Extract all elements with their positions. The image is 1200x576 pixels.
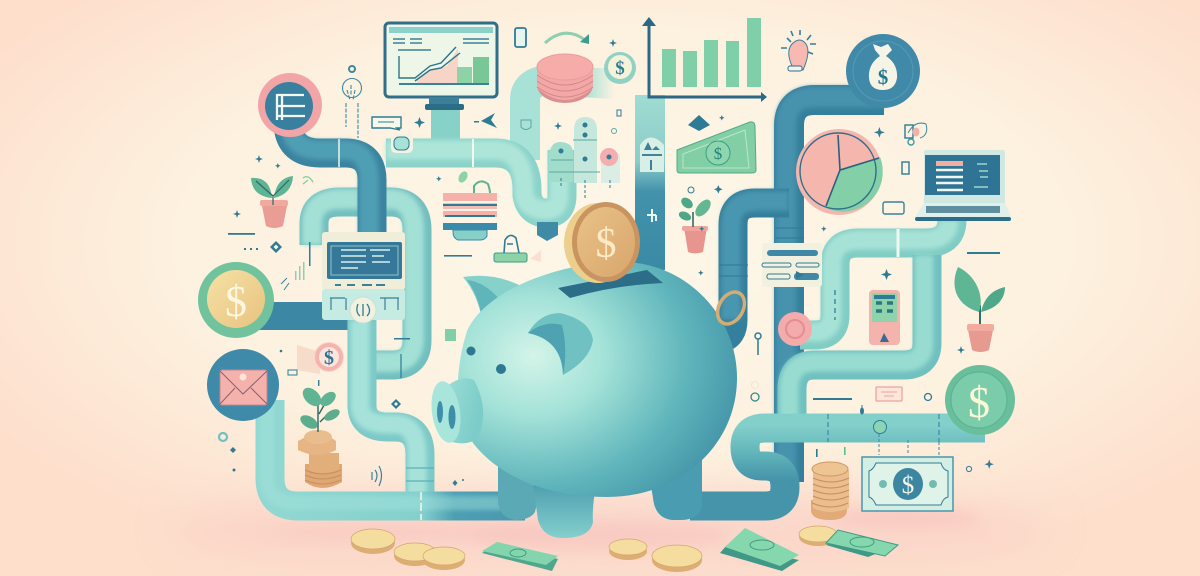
small scattered icons	[219, 39, 1000, 486]
snout	[432, 378, 483, 443]
green banknote: $	[714, 144, 722, 163]
monitor	[385, 23, 497, 110]
gold coin in slot: $	[596, 221, 616, 267]
floor coins	[351, 526, 837, 572]
small dollar coin	[604, 52, 636, 84]
pipe: funnel tip	[537, 222, 558, 241]
floor banknotes	[482, 528, 898, 571]
speech bubble	[372, 117, 401, 130]
eyes	[466, 346, 476, 356]
right leg	[650, 452, 702, 520]
plant: right	[954, 267, 1005, 352]
money bag badge	[846, 34, 920, 108]
pipe: coin stack riser	[525, 80, 615, 160]
coin stack with sprout	[298, 384, 342, 488]
pipe clamp	[391, 134, 413, 153]
floor shadow glow	[170, 488, 1050, 568]
bar chart	[642, 17, 767, 102]
pink coin stack	[537, 54, 593, 103]
chip panels	[549, 117, 620, 200]
coin badge: left	[198, 262, 274, 338]
lightbulb sketch	[342, 66, 362, 138]
slot	[558, 270, 663, 298]
money bag badge: $	[878, 65, 888, 89]
near ear	[528, 313, 593, 375]
gold coin in slot	[564, 202, 640, 283]
pipe: dark vertical right	[775, 97, 884, 482]
small dollar coin: $	[615, 58, 625, 79]
pie chart	[796, 129, 883, 215]
pipe locator ring	[874, 420, 939, 455]
pipe: dark coin link	[250, 302, 360, 330]
plant: middle	[677, 195, 714, 254]
coin badge: left: $	[225, 277, 247, 326]
badge: list icon	[258, 73, 322, 137]
pipe: dark branch to pig	[719, 201, 789, 338]
phone icon	[515, 28, 526, 47]
front leg	[533, 485, 595, 538]
pink button	[778, 312, 812, 346]
pipe: top manifold	[288, 125, 562, 245]
green banknote	[677, 122, 756, 173]
large banknote: $	[902, 472, 914, 499]
small pink dollar coin: $	[324, 347, 334, 369]
pipe: centre vertical	[635, 95, 665, 270]
large banknote	[862, 457, 953, 511]
green dollar badge	[945, 365, 1015, 435]
pipe: monitor stem	[431, 105, 460, 153]
light bulb	[781, 30, 816, 71]
pink note tag	[876, 387, 902, 401]
binder clip icon	[494, 235, 541, 262]
small outlined box	[883, 202, 904, 214]
plant: left	[251, 176, 293, 228]
pipe: right long bend	[789, 255, 927, 425]
arrow arc	[545, 33, 589, 44]
green dollar badge: $	[968, 378, 990, 427]
pipe: central S-bend	[360, 320, 434, 503]
body	[458, 262, 737, 497]
calculator device	[869, 290, 900, 345]
badge: envelope	[207, 349, 279, 421]
pipe: bottom right S-bend	[690, 414, 985, 506]
centre pipe badge	[640, 138, 664, 222]
small pink dollar coin	[297, 342, 344, 374]
coin stack right	[811, 462, 849, 520]
machine	[322, 232, 405, 323]
back leg	[498, 460, 540, 520]
pipe: left arch	[312, 199, 417, 365]
pipe: laptop feed	[800, 220, 952, 335]
striped document icon	[443, 170, 497, 240]
ui card	[762, 243, 822, 287]
laptop	[915, 150, 1011, 221]
left ear	[463, 276, 523, 320]
piggy bank	[428, 262, 737, 538]
brass ring on pig	[712, 287, 750, 329]
pipe: bottom from envelope	[267, 400, 525, 520]
key icon	[755, 333, 761, 355]
